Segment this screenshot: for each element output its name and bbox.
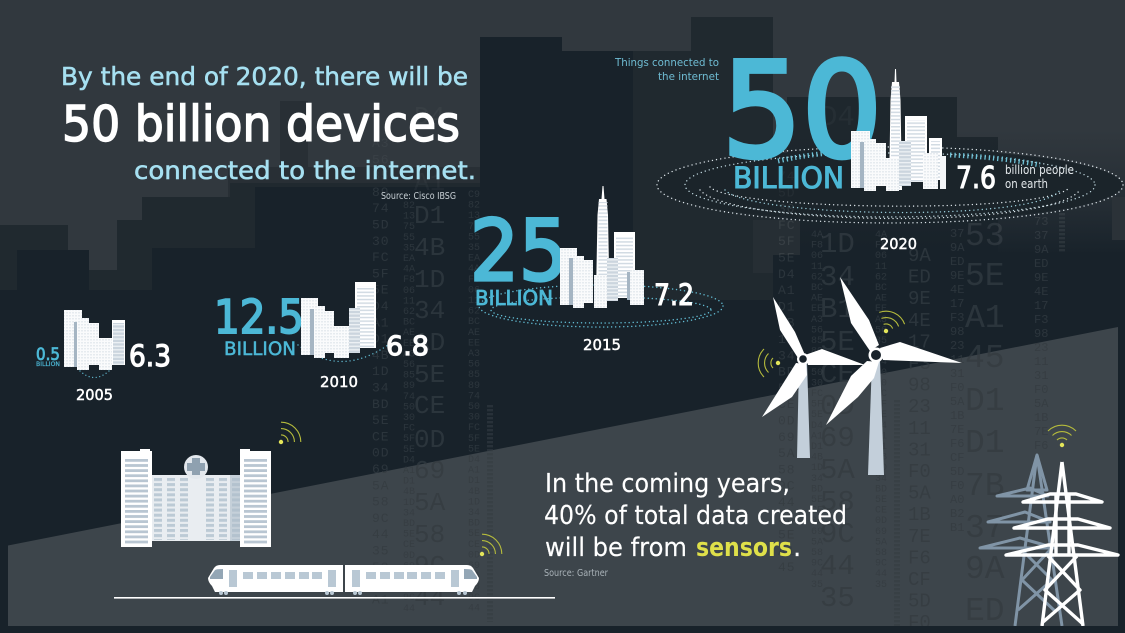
icon: hospital <box>121 449 271 547</box>
city 2005 <box>64 310 125 370</box>
year 2015: 2015 <box>583 336 621 354</box>
city 2010 <box>301 282 376 358</box>
people caption: on earth <box>1005 177 1048 191</box>
people 6.3: 6.3 <box>129 339 171 373</box>
data band panel <box>8 327 1118 626</box>
sensors statement: In the coming years, <box>545 469 790 499</box>
sensors statement: sensors <box>696 533 792 563</box>
sensors statement: . <box>793 533 801 563</box>
number 12.5: 12.5 <box>214 290 304 344</box>
stat: 2015 <box>470 186 723 354</box>
sensors statement: 40% of total data created <box>544 501 847 531</box>
billion label: BILLION <box>36 360 60 368</box>
caption: things connected <box>614 57 719 83</box>
hex data columns <box>372 171 1065 626</box>
billion label: BILLION <box>224 339 296 360</box>
ring 2010 <box>298 345 388 362</box>
number 0.5: 0.5 <box>36 345 60 365</box>
sensors statement: will be from <box>545 533 687 563</box>
year 2020: 2020 <box>880 235 917 253</box>
source: Gartner: Source: Gartner <box>544 568 608 579</box>
people 7.2: 7.2 <box>654 278 694 312</box>
title: By the end of 2020, there will be <box>61 62 468 91</box>
year 2010: 2010 <box>320 373 358 391</box>
number 50: 50 <box>722 34 882 187</box>
stat: 2020 <box>657 34 1123 253</box>
caption: things connected: the internet <box>658 71 719 83</box>
people caption: billion people <box>1005 163 1074 177</box>
sensors statement <box>544 469 847 563</box>
people caption <box>1005 163 1074 191</box>
icon: tower signal <box>1048 425 1076 447</box>
icon: hospital signal <box>270 418 305 453</box>
source: Cisco IBSG: Source: Cisco IBSG <box>381 191 456 202</box>
year 2005: 2005 <box>76 386 113 404</box>
city 2020 <box>851 69 946 191</box>
rings 2020 <box>657 147 1123 223</box>
caption: things connected: Things connected to <box>614 57 719 69</box>
billion label: BILLION <box>733 161 844 195</box>
stat: 2010 <box>214 282 429 391</box>
icon: train <box>114 565 555 599</box>
title: connected to the internet. <box>134 156 476 185</box>
icon: train signal <box>471 530 506 565</box>
icon: turbine signals <box>758 307 907 377</box>
title <box>61 62 476 185</box>
icon: wind turbines <box>762 277 962 475</box>
icon: transmission towers <box>980 455 1118 626</box>
city 2015 <box>560 186 644 308</box>
ring 2005 <box>80 371 109 378</box>
people 7.6: 7.6 <box>956 161 996 196</box>
rings 2015 <box>479 285 723 327</box>
people 6.8: 6.8 <box>386 331 429 362</box>
billion label: BILLION <box>475 286 553 310</box>
number 25: 25 <box>470 202 568 300</box>
title: 50 billion devices <box>62 96 460 153</box>
stat: 2005 <box>36 310 171 404</box>
